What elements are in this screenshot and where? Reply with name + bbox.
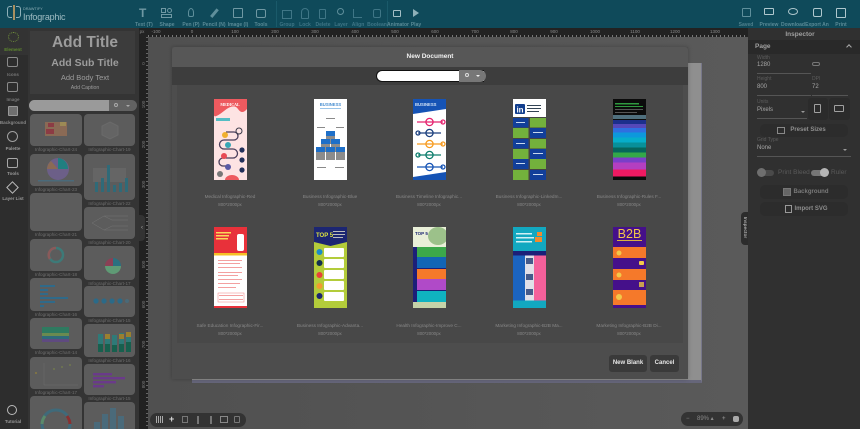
logo xyxy=(7,5,66,22)
tool: text: T xyxy=(139,6,146,20)
label timeline: 800*2000px xyxy=(417,202,441,207)
sidebar tool column xyxy=(0,28,28,429)
action: export xyxy=(805,8,829,28)
label chart 20: Infographic-Chart-20 xyxy=(88,240,131,245)
page section header xyxy=(748,40,860,54)
label medical xyxy=(205,194,255,207)
chart card 23 xyxy=(30,154,82,186)
template: business infographic blue xyxy=(303,99,357,207)
text: 200 xyxy=(271,28,279,34)
tab: element: Element xyxy=(4,47,22,52)
modal: new document xyxy=(172,47,688,379)
width field xyxy=(757,55,811,75)
label chart 16b: Infographic-Chart-16 xyxy=(88,358,131,363)
tab: icons xyxy=(7,57,19,77)
print bleed toggle: Print Bleed xyxy=(778,169,810,176)
text presets xyxy=(30,31,135,94)
label linkedin: 800*2000px xyxy=(517,202,541,207)
tool: pen xyxy=(182,8,200,28)
tool: pencil: Pencil (N) xyxy=(202,22,226,28)
add body text: Add Body Text xyxy=(61,73,109,82)
action: saved: Saved xyxy=(739,22,753,28)
tab: background: Background xyxy=(0,120,26,125)
chart card 16 xyxy=(30,278,82,311)
height field xyxy=(757,76,811,97)
tool: text: Text (T) xyxy=(135,22,153,28)
units field: Units xyxy=(757,99,768,105)
label business blue: Business Infographic-Blue xyxy=(303,194,357,199)
template: marketing b2b digital xyxy=(604,227,654,333)
tool: tools: Tools xyxy=(255,22,267,28)
label business blue xyxy=(303,194,357,207)
units field: Pixels xyxy=(757,107,773,113)
background button xyxy=(760,185,848,199)
label advantages xyxy=(305,323,355,335)
label chart 23: Infographic-Chart-23 xyxy=(35,187,77,192)
label chart 17: Infographic-Chart-17 xyxy=(88,281,131,286)
tool: pen: Pen (P) xyxy=(182,22,200,28)
modal header xyxy=(172,47,688,67)
chart card 17b xyxy=(30,357,82,389)
text: 800 xyxy=(510,28,518,34)
background button: Background xyxy=(793,189,828,195)
tool: lock: Lock xyxy=(299,22,311,28)
label advantages: 800*2000px xyxy=(318,331,342,336)
chart card 18 xyxy=(30,239,82,271)
tab: icons: Icons xyxy=(7,72,19,77)
template: business linkedin xyxy=(496,99,562,207)
tool: boolean xyxy=(367,9,387,28)
tool: tools xyxy=(254,9,268,28)
template grid panel xyxy=(177,85,683,343)
label timeline xyxy=(396,194,462,207)
left panel collapse handle xyxy=(139,215,145,241)
chart card 24 xyxy=(30,114,82,146)
label chart 14: Infographic-Chart-14 xyxy=(35,350,77,355)
vertical ruler: 800 xyxy=(141,381,146,388)
add caption: Add Caption xyxy=(71,85,99,91)
tab: tools: Tools xyxy=(7,171,19,176)
chart card 22 xyxy=(84,154,135,200)
tool: text xyxy=(135,6,153,28)
inspector title: Inspector xyxy=(785,31,815,38)
label chart 19: Infographic-Chart-19 xyxy=(88,147,131,152)
action: export: Export An xyxy=(805,22,829,28)
button: cancel xyxy=(650,355,679,372)
template: medical infographic red xyxy=(205,99,255,207)
label timeline: Business Timeline Infographic... xyxy=(396,194,462,199)
tab: background xyxy=(0,106,26,125)
tool: boolean: Boolean xyxy=(367,22,387,28)
action: saved xyxy=(738,8,753,28)
element library panel xyxy=(28,28,139,429)
label rules: 800*2000px xyxy=(617,202,641,207)
import svg button xyxy=(760,202,848,216)
text: 0 xyxy=(191,28,193,34)
vertical ruler: 200 xyxy=(141,141,146,148)
tool: lock xyxy=(299,8,311,28)
vertical ruler: 100 xyxy=(141,101,146,108)
label marketing digital: Marketing Infographic-B2B Di... xyxy=(596,323,662,328)
text: 100 xyxy=(231,28,239,34)
vertical ruler xyxy=(139,37,148,429)
tool: play: Play xyxy=(411,22,421,28)
template: business rules xyxy=(597,99,661,207)
units field xyxy=(757,99,807,119)
template: business infographic blue: BUSINESS xyxy=(320,102,341,107)
label chart 15: Infographic-Chart-15 xyxy=(88,318,131,323)
tab: palette xyxy=(6,131,20,151)
preset sizes button: Preset Sizes xyxy=(790,127,826,133)
inspector panel xyxy=(748,28,860,429)
preset sizes button xyxy=(760,124,848,137)
action: preview: Preview xyxy=(760,22,778,28)
label safe education xyxy=(196,323,263,336)
chart card 15b xyxy=(84,364,135,395)
text: 700 xyxy=(471,28,479,34)
text: 600 xyxy=(431,28,439,34)
bottom left toolbar: + xyxy=(169,414,174,424)
label marketing digital: 800*2000px xyxy=(617,331,641,336)
button: new blank xyxy=(609,355,647,372)
bottom left toolbar xyxy=(150,413,246,427)
text: 1300 xyxy=(710,28,720,34)
label rules xyxy=(597,194,661,207)
label chart 15b: Infographic-Chart-15 xyxy=(88,396,131,401)
action: download: Download xyxy=(781,22,805,28)
tool: align: Align xyxy=(352,22,364,28)
text: 900 xyxy=(550,28,558,34)
label marketing digital xyxy=(604,323,654,335)
text: px xyxy=(140,28,144,34)
chart card 21 xyxy=(30,193,82,231)
zoom control: 89% ▴ xyxy=(697,416,714,422)
template: marketing b2b main xyxy=(504,227,554,333)
add title: Add Title xyxy=(52,34,118,51)
label chart 24: Infographic-Chart-24 xyxy=(35,147,77,152)
background page xyxy=(192,63,702,383)
chart card bars xyxy=(84,402,135,429)
label medical: 800*2000px xyxy=(218,202,242,207)
label business blue: 800*2000px xyxy=(318,202,342,207)
tab: tutorial xyxy=(4,405,21,424)
chart card gauge xyxy=(30,396,82,429)
tool: image xyxy=(228,8,248,28)
page section header: Page xyxy=(755,43,771,50)
template: health infographic: TOP 5 xyxy=(415,231,428,236)
chart card 19 xyxy=(84,114,135,146)
link icon xyxy=(812,62,820,66)
zoom control: − xyxy=(686,416,690,422)
tool: shape: Shape xyxy=(159,22,174,28)
height field: 800 xyxy=(757,84,767,90)
print bleed toggle xyxy=(757,168,809,178)
label marketing main: Marketing Infographic-B2B Ma... xyxy=(495,323,563,328)
search row xyxy=(172,67,688,85)
template: business advantages xyxy=(297,227,363,336)
template: medical infographic red: MEDICAL xyxy=(220,102,240,107)
grid type field: None xyxy=(757,145,771,151)
template: safe education xyxy=(196,227,263,336)
ruler toggle xyxy=(811,168,853,178)
landscape button xyxy=(829,98,850,120)
vertical ruler: 400 xyxy=(141,221,146,228)
ruler toggle: Ruler xyxy=(831,169,847,176)
template: health infographic xyxy=(404,227,454,333)
inspector side tab xyxy=(741,212,748,245)
label safe education: 800*2000px xyxy=(218,331,242,336)
height field: Height xyxy=(757,76,771,82)
tab: layer list xyxy=(2,181,24,201)
label linkedin: Business Infographic-LinkedIn... xyxy=(496,194,562,199)
dpi field: 72 xyxy=(812,84,819,90)
tab: tutorial: Tutorial xyxy=(5,419,21,424)
label health xyxy=(404,323,454,335)
add sub title: Add Sub Title xyxy=(51,57,119,69)
grid type field: Grid Type xyxy=(757,137,779,143)
text: -100 xyxy=(151,28,161,34)
vertical ruler: 500 xyxy=(141,261,146,268)
zoom control: + xyxy=(722,416,726,422)
action: print: Print xyxy=(835,22,847,28)
text: 1000 xyxy=(590,28,600,34)
label safe education: Safe Education Infographic-Fir... xyxy=(197,323,263,328)
chart card 15 xyxy=(84,286,135,317)
portrait button xyxy=(808,98,828,120)
label advantages: Business Infographic-Advanta... xyxy=(297,323,363,328)
template: business timeline xyxy=(396,99,462,207)
action: download xyxy=(781,8,805,28)
tool: play xyxy=(411,9,421,28)
action: print xyxy=(835,8,847,28)
zoom control xyxy=(681,412,743,426)
top toolbar xyxy=(0,0,860,28)
chart card 20 xyxy=(84,207,135,239)
tool: animator: Animator xyxy=(387,22,409,28)
tool: delete: Delete xyxy=(315,22,330,28)
label chart 18: Infographic-Chart-18 xyxy=(35,272,77,277)
template: marketing b2b digital: B2B xyxy=(618,227,641,241)
template: business timeline: BUSINESS xyxy=(415,102,437,107)
label rules: Business Infographic-Rules F... xyxy=(597,194,661,199)
text: 500 xyxy=(391,28,399,34)
tab: layer list: Layer List xyxy=(2,196,24,201)
grid type field xyxy=(757,137,851,158)
horizontal ruler xyxy=(139,28,748,37)
label health: 800*2000px xyxy=(417,331,441,336)
vertical ruler: 700 xyxy=(141,341,146,348)
tool: group: Group xyxy=(280,22,294,28)
label chart 21: Infographic-Chart-21 xyxy=(35,232,77,237)
tab: image: Image xyxy=(6,97,20,102)
tool: image: Image (I) xyxy=(228,22,248,28)
tab: palette: Palette xyxy=(6,146,20,151)
label chart 17b: Infographic-Chart-17 xyxy=(35,390,77,395)
import svg button: Import SVG xyxy=(794,206,828,212)
search input xyxy=(376,70,484,82)
text: 1200 xyxy=(670,28,680,34)
label chart 22: Infographic-Chart-22 xyxy=(88,201,131,206)
vertical ruler: 0 xyxy=(141,62,146,65)
dpi field xyxy=(812,76,848,97)
text: 300 xyxy=(311,28,319,34)
label medical: Medical Infographic-Red xyxy=(205,194,255,199)
tool: group xyxy=(280,10,294,28)
search buttons xyxy=(459,70,486,82)
tool: align xyxy=(352,9,364,28)
action: preview xyxy=(760,8,778,28)
label chart 16: Infographic-Chart-16 xyxy=(35,312,77,317)
tool: layer: Layer xyxy=(334,22,348,28)
chart card 14 xyxy=(30,318,82,349)
inspector side tab: Inspector xyxy=(742,217,747,238)
tool: pencil xyxy=(202,8,226,28)
label linkedin xyxy=(496,194,562,207)
canvas background xyxy=(148,37,748,429)
text: 1100 xyxy=(630,28,640,34)
button: cancel: Cancel xyxy=(655,360,674,366)
modal title: New Document xyxy=(407,53,453,60)
chart card 16b xyxy=(84,324,135,357)
width field: Width xyxy=(757,55,770,61)
template: business linkedin: in xyxy=(516,106,524,114)
text: 400 xyxy=(351,28,359,34)
template: business advantages: TOP 5 xyxy=(316,233,334,239)
label marketing main xyxy=(504,323,554,335)
vertical ruler: 600 xyxy=(141,301,146,308)
tab: image xyxy=(6,82,20,102)
logo: Infographic xyxy=(23,12,65,22)
label health: Health Infographic-Improve C... xyxy=(396,323,462,328)
tool: delete xyxy=(315,9,330,28)
tool: animator xyxy=(387,10,409,28)
label marketing main: 800*2000px xyxy=(517,331,541,336)
width field: 1280 xyxy=(757,62,770,68)
tab: tools xyxy=(7,158,19,176)
chart card 17 xyxy=(84,246,135,280)
left panel collapse handle: ‹ xyxy=(141,225,143,231)
tool: layer xyxy=(334,8,348,28)
tab: element xyxy=(0,28,28,55)
dpi field: DPI xyxy=(812,76,820,82)
button: new blank: New Blank xyxy=(613,360,643,366)
vertical ruler: 300 xyxy=(141,181,146,188)
tool: shape xyxy=(159,8,174,28)
panel search bar xyxy=(29,100,137,111)
logo: DRAWTIFY xyxy=(23,7,43,11)
